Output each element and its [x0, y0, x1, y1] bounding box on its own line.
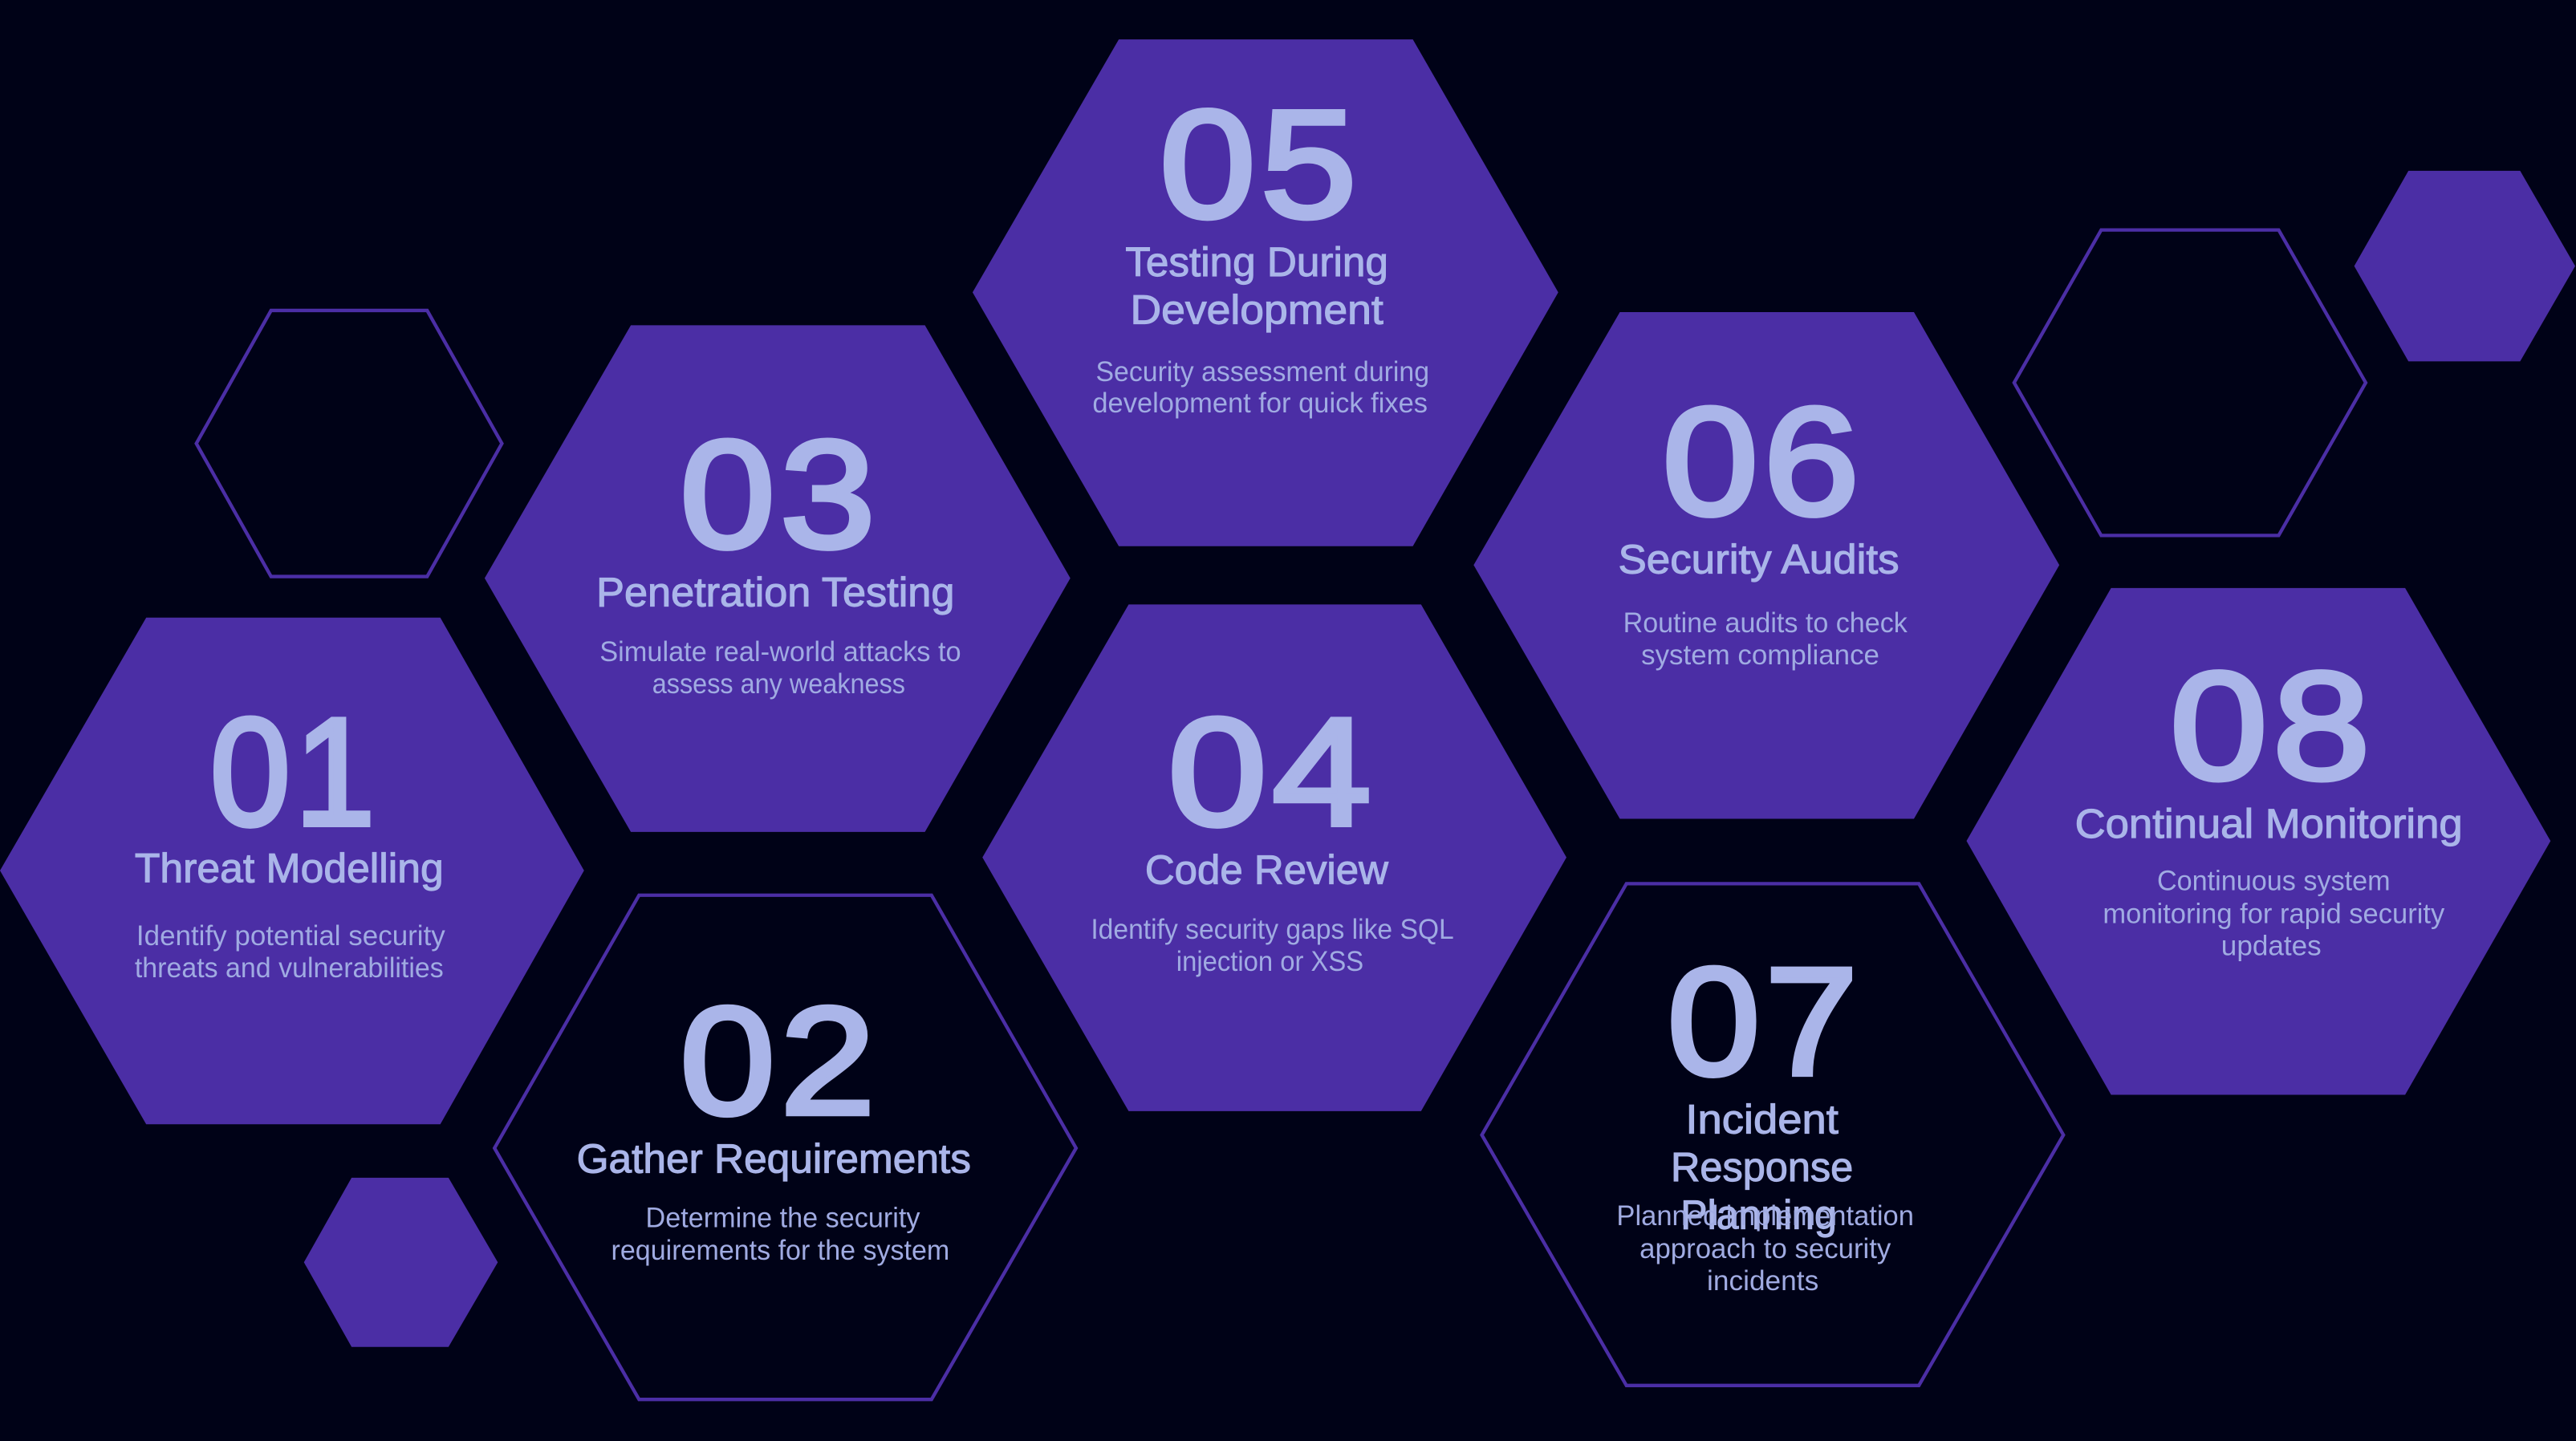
description 07: incidents: [1707, 1265, 1818, 1297]
hexagon 07: [1482, 883, 2063, 1386]
heading 05: Testing During: [1125, 239, 1388, 285]
heading 06: Security Audits: [1618, 536, 1899, 582]
description 02: requirements for the system: [611, 1235, 949, 1266]
decorative outlined hexagon, upper left: [197, 311, 502, 577]
description 03: [599, 636, 961, 700]
hexagon 03: [485, 325, 1071, 832]
description 04: Identify security gaps like SQL: [1091, 914, 1454, 945]
panel: step 08 Continual Monitoring: [1966, 588, 2550, 1094]
hexagon 04: [982, 604, 1566, 1111]
number 08: 08: [2170, 641, 2375, 811]
description 08: [2103, 866, 2445, 961]
description 04: [1091, 914, 1454, 977]
panel: step 05 Testing During Development: [973, 39, 1558, 546]
description 07: Planned implementation: [1616, 1200, 1914, 1232]
description 01: threats and vulnerabilities: [135, 952, 444, 984]
description 08: monitoring for rapid security: [2103, 899, 2445, 930]
heading 08: Continual Monitoring: [2075, 801, 2463, 846]
heading 04: Code Review: [1145, 846, 1389, 892]
panel: step 03 Penetration Testing: [485, 325, 1071, 832]
heading 03: Penetration Testing: [596, 569, 954, 615]
description 03: assess any weakness: [652, 668, 905, 700]
number 03: 03: [681, 410, 880, 580]
description 06: [1623, 607, 1908, 671]
number 05: 05: [1160, 79, 1362, 250]
description 04: injection or XSS: [1176, 946, 1363, 977]
description 05: Security assessment during: [1095, 356, 1429, 388]
number 01: 01: [210, 688, 380, 858]
description 02: [611, 1202, 949, 1266]
panel: step 07 Incident Response Planning: [1482, 883, 2063, 1386]
hexagon 01: [0, 618, 584, 1124]
number 06: 06: [1663, 377, 1865, 547]
description 01: Identify potential security: [136, 920, 445, 952]
panel: step 01 Threat Modelling: [0, 618, 584, 1124]
number 02: 02: [681, 976, 880, 1147]
description 08: Continuous system: [2157, 866, 2391, 897]
description 06: system compliance: [1641, 639, 1879, 671]
heading 02: Gather Requirements: [577, 1136, 971, 1182]
number 07: 07: [1668, 937, 1863, 1107]
description 05: [1092, 356, 1429, 419]
panel: step 04 Code Review: [982, 604, 1566, 1111]
number 04: 04: [1168, 688, 1377, 858]
decorative filled hexagon, top right: [2355, 171, 2575, 361]
description 05: development for quick fixes: [1092, 388, 1428, 419]
decorative filled hexagon, lower left: [304, 1178, 498, 1347]
heading 05: Development: [1130, 286, 1383, 332]
heading 07: [1671, 1097, 1853, 1237]
hexagon 05: [973, 39, 1558, 546]
description 01: [135, 920, 445, 984]
panel: step 02 Gather Requirements: [494, 895, 1076, 1399]
description 07: approach to security: [1639, 1233, 1891, 1264]
heading 07: Response: [1671, 1144, 1853, 1190]
description 02: Determine the security: [646, 1202, 920, 1233]
hexagon 06: [1473, 312, 2059, 819]
panel: step 06 Security Audits: [1473, 312, 2059, 819]
heading 05: [1125, 239, 1388, 332]
description 03: Simulate real-world attacks to: [599, 636, 961, 668]
heading 07: Incident: [1685, 1097, 1839, 1143]
heading 07: Planning: [1680, 1191, 1837, 1237]
description 07: [1616, 1200, 1914, 1297]
hexagon 02: [494, 895, 1076, 1399]
description 06: Routine audits to check: [1623, 607, 1908, 639]
description 08: updates: [2221, 930, 2322, 961]
heading 01: Threat Modelling: [135, 845, 444, 891]
hexagon 08: [1966, 588, 2550, 1094]
decorative outlined hexagon, upper right: [2014, 230, 2366, 535]
